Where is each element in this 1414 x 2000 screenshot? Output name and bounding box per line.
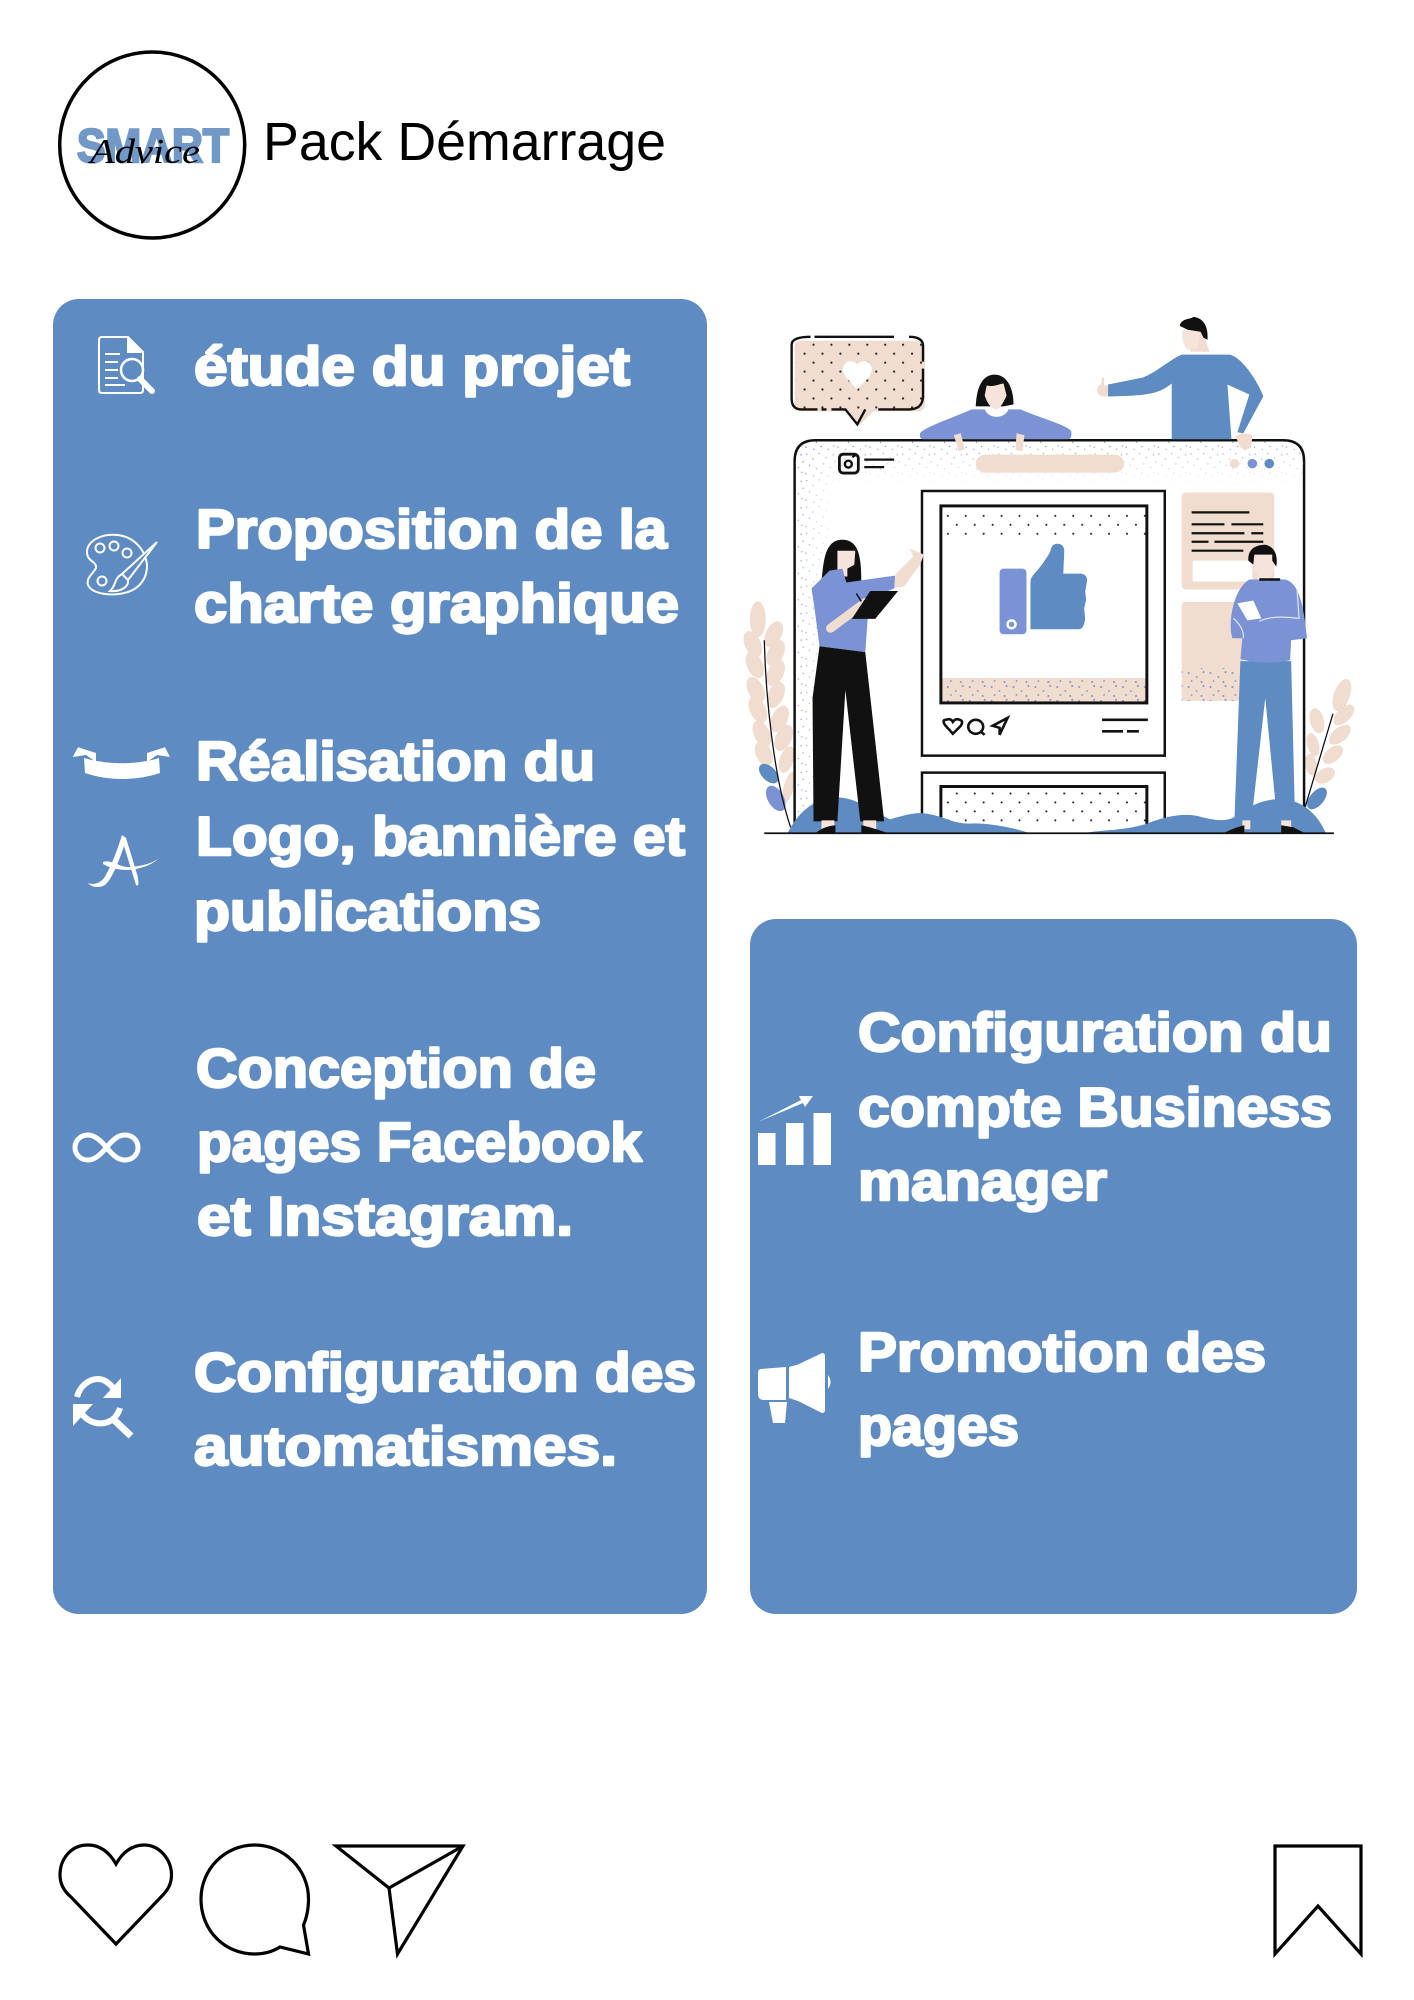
icon: megaphone xyxy=(758,1353,830,1423)
icon: document search xyxy=(99,337,152,393)
icon: palette and brush xyxy=(87,535,157,594)
text: Promotion des pages: pages xyxy=(858,1395,1019,1457)
window buttons xyxy=(1230,459,1274,468)
logo: Smart Advice: SMART xyxy=(77,119,229,172)
person: woman leaning on window xyxy=(920,375,1071,451)
logo: Smart Advice: Advice xyxy=(88,132,200,171)
instagram icon xyxy=(839,454,894,473)
side card xyxy=(1182,602,1243,701)
panel: right services xyxy=(750,919,1357,1614)
icon: banner xyxy=(73,747,170,779)
person: man with tablet xyxy=(1223,545,1307,833)
plants xyxy=(740,601,1358,827)
text: Configuration des automatismes: automatismes. xyxy=(194,1415,617,1477)
icon: bookmark xyxy=(1275,1846,1361,1954)
text: Réalisation du Logo, bannière et publications: Réalisation du xyxy=(196,730,595,792)
text: Proposition de la charte graphique: charte graphique xyxy=(194,572,679,634)
logo: Smart Advice xyxy=(60,52,245,238)
icon: comment bubble xyxy=(201,1845,308,1954)
text: Proposition de la charte graphique: Proposition de la xyxy=(196,498,667,560)
text: Réalisation du Logo, bannière et publications: publications xyxy=(194,880,541,942)
text: Configuration du compte Business manager: Configuration du xyxy=(858,1001,1332,1063)
person: woman with tablet xyxy=(812,540,924,833)
text: Promotion des pages xyxy=(858,1321,1266,1457)
second post frame xyxy=(922,773,1165,833)
address bar xyxy=(976,455,1124,473)
ground line xyxy=(764,832,1334,834)
text: Configuration du compte Business manager xyxy=(858,1001,1332,1212)
text: Configuration du compte Business manager: compte Business xyxy=(858,1076,1332,1138)
icon: thumbs up xyxy=(1000,544,1087,634)
side card with text lines xyxy=(1182,492,1274,589)
text: Configuration du compte Business manager: manager xyxy=(858,1150,1107,1212)
post frame xyxy=(922,491,1165,756)
text: Conception de pages Facebook et Instagram: pages Facebook xyxy=(197,1111,642,1173)
icon: share paper plane xyxy=(336,1846,463,1954)
panel: left services xyxy=(53,299,707,1614)
title: Pack Démarrage xyxy=(263,112,666,172)
ground hills xyxy=(788,797,1326,833)
text: Promotion des pages: Promotion des xyxy=(858,1321,1266,1383)
text: Configuration des automatismes xyxy=(194,1341,696,1477)
icon: calligraphic A xyxy=(88,835,158,887)
post actions xyxy=(944,718,1148,735)
text: Proposition de la charte graphique xyxy=(194,498,679,634)
text: Réalisation du Logo, bannière et publications: Logo, bannière et xyxy=(196,805,685,867)
icon: refresh search xyxy=(73,1378,131,1436)
speech bubble with heart xyxy=(792,337,925,425)
text: étude du projet: étude du projet xyxy=(194,335,630,397)
text: Conception de pages Facebook et Instagram: Conception de xyxy=(196,1037,596,1099)
text: Configuration des automatismes: Configuration des xyxy=(194,1341,696,1403)
browser window xyxy=(795,440,1304,833)
text: Conception de pages Facebook et Instagram: et Instagram. xyxy=(197,1185,573,1247)
text: Conception de pages Facebook et Instagram xyxy=(196,1037,642,1247)
icon: like heart xyxy=(60,1845,172,1944)
icon: infinity xyxy=(75,1135,138,1160)
person: man giving thumbs up xyxy=(1097,317,1263,449)
icon: growth bar chart xyxy=(758,1096,831,1165)
text: Réalisation du Logo, bannière et publications xyxy=(194,730,685,942)
illustration: social media team xyxy=(740,317,1358,833)
